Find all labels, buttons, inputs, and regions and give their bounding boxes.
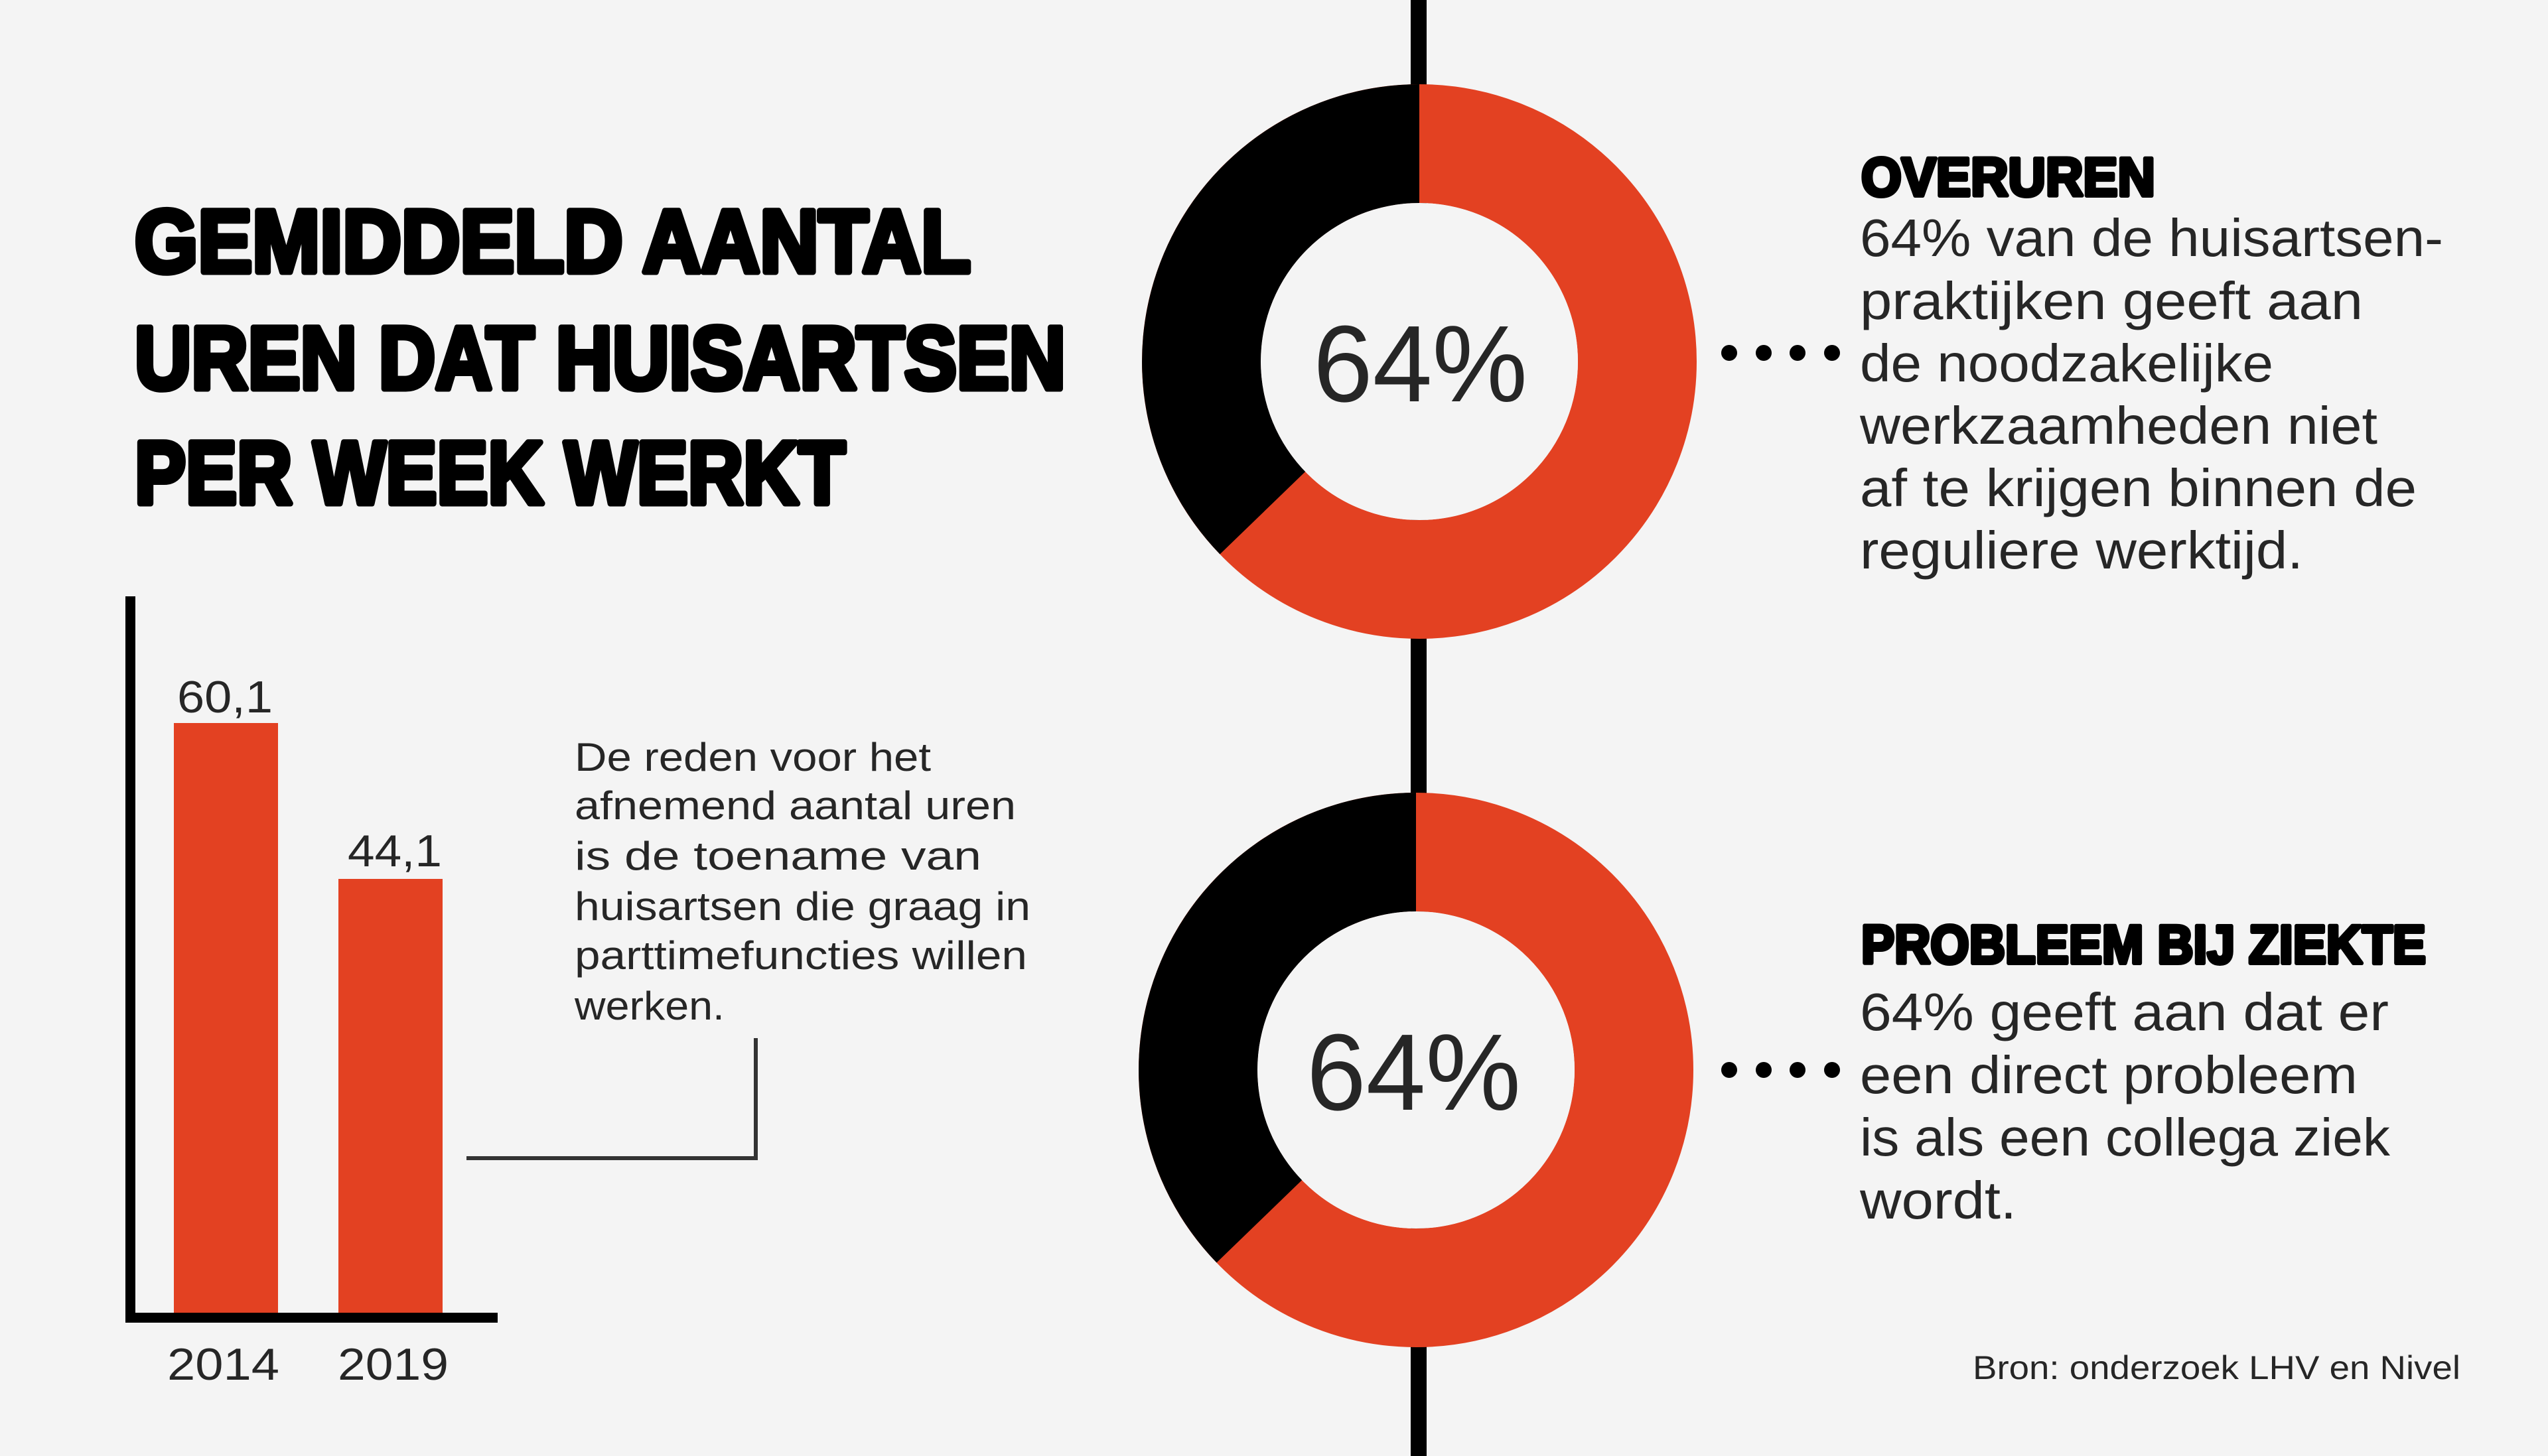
bar 2014 — [174, 723, 278, 1313]
donut chart: overuren 64% — [1142, 84, 1638, 580]
source note: Bron: onderzoek LHV en Nivel — [1973, 1349, 2460, 1386]
dotted connector: overuren — [1721, 345, 1840, 361]
body: probleem bij ziekte: is als een collega ziek — [1860, 1108, 2391, 1167]
callout text: werken. — [574, 984, 725, 1028]
callout text: parttimefuncties willen — [575, 933, 1027, 978]
donut value: 64% — [1313, 303, 1527, 425]
donut value: 64% — [1307, 1012, 1521, 1133]
bar 2019 — [338, 879, 443, 1313]
body: overuren: af te krijgen binnen de — [1860, 458, 2417, 517]
year label 2014: 2014 — [167, 1339, 279, 1390]
title: GEMIDDELD AANTAL — [135, 192, 971, 291]
y axis — [125, 596, 135, 1323]
body: probleem bij ziekte: een direct probleem — [1860, 1045, 2358, 1104]
x axis — [125, 1313, 498, 1323]
heading: overuren: OVERUREN — [1861, 147, 2155, 208]
body: probleem bij ziekte — [1859, 982, 2391, 1230]
text block: probleem bij ziekte — [1859, 915, 2426, 1230]
value label 2014: 60,1 — [177, 672, 273, 722]
title: PER WEEK WERKT — [135, 424, 845, 523]
body: overuren: 64% van de huisartsen- — [1860, 208, 2443, 267]
dotted connector: probleem bij ziekte — [1721, 1062, 1840, 1078]
body: overuren: reguliere werktijd. — [1860, 521, 2303, 580]
body: overuren: praktijken geeft aan — [1860, 271, 2363, 330]
body: overuren: werkzaamheden niet — [1859, 396, 2377, 455]
callout text: afnemend aantal uren — [575, 783, 1016, 828]
bar chart — [125, 596, 498, 1390]
body: probleem bij ziekte: wordt. — [1859, 1171, 2017, 1230]
body: overuren: de noodzakelijke — [1860, 334, 2273, 393]
text block: overuren — [1859, 147, 2443, 580]
title — [135, 192, 1066, 523]
vertical timeline line — [1411, 0, 1427, 1456]
body: overuren — [1859, 208, 2443, 580]
callout text: huisartsen die graag in — [575, 884, 1030, 929]
callout text: is de toename van — [575, 834, 981, 878]
body: probleem bij ziekte: 64% geeft aan dat er — [1860, 982, 2389, 1041]
callout text — [574, 735, 1030, 1028]
value label 2019: 44,1 — [348, 826, 442, 876]
donut chart: probleem bij ziekte 64% — [1139, 793, 1634, 1288]
heading: probleem bij ziekte: PROBLEEM BIJ ZIEKTE — [1861, 915, 2426, 975]
year label 2019: 2019 — [338, 1339, 449, 1390]
callout connector — [466, 1038, 756, 1158]
callout text: De reden voor het — [575, 735, 931, 779]
title: UREN DAT HUISARTSEN — [135, 309, 1066, 408]
